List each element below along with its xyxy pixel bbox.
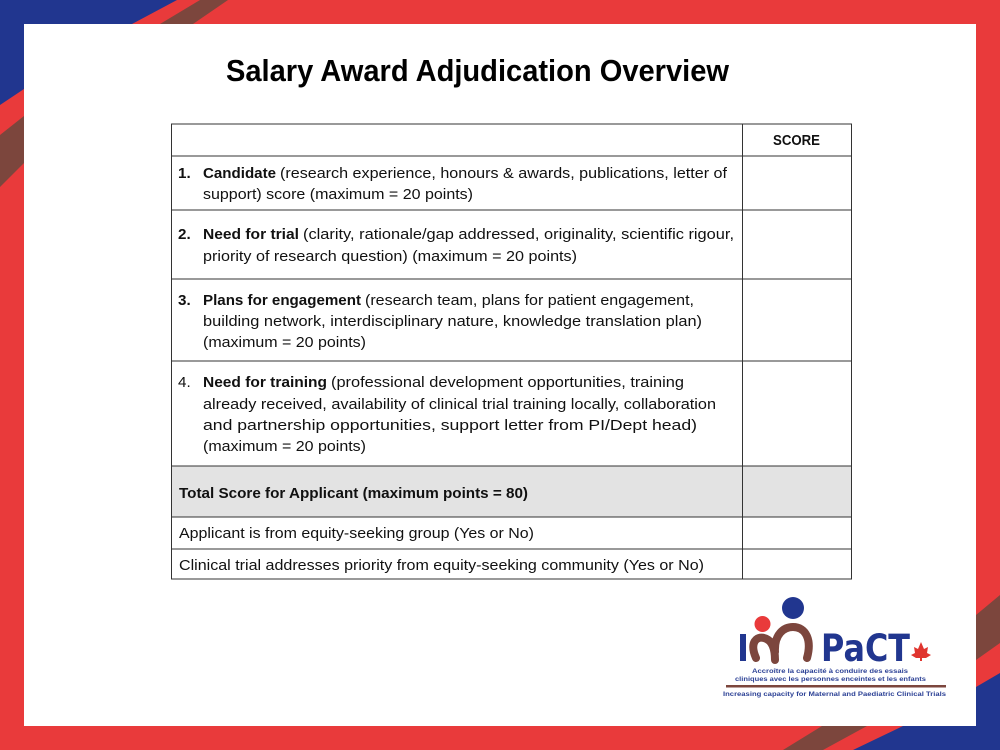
score table bbox=[172, 124, 852, 579]
row 4: need for training bbox=[178, 374, 716, 455]
row 2: need for trial: 2. bbox=[178, 226, 191, 243]
row 3: plans for engagement bbox=[178, 292, 702, 351]
table grid bbox=[172, 124, 852, 579]
row 3: plans for engagement: (maximum = 20 points) bbox=[203, 334, 366, 351]
header: score: SCORE bbox=[773, 132, 820, 149]
row 1: candidate: support) score (maximum = 20 points) bbox=[203, 186, 473, 203]
row 3: plans for engagement: (research team, plans for patient engagement, bbox=[365, 292, 694, 309]
equity community row: Clinical trial addresses priority from equity-seeking community (Yes or No) bbox=[179, 557, 704, 574]
row 4: need for training: (professional development opportunities, training bbox=[331, 374, 684, 391]
logo tagline english: Increasing capacity for Maternal and Paediatric Clinical Trials bbox=[723, 691, 946, 698]
title: Salary Award Adjudication Overview bbox=[226, 53, 730, 88]
logo tagline french: Accroître la capacité à conduire des essais bbox=[752, 668, 908, 675]
row 3: plans for engagement: building network, interdisciplinary nature, knowledge translation plan) bbox=[203, 313, 702, 330]
row 3: plans for engagement: Plans for engagement bbox=[203, 292, 361, 309]
row 1: candidate: 1. bbox=[178, 165, 191, 182]
icon: maple leaf bbox=[911, 642, 931, 661]
row 2: need for trial: Need for trial bbox=[203, 226, 299, 243]
logo wordmark bbox=[740, 627, 911, 670]
row 1: candidate: (research experience, honours & awards, publications, letter of bbox=[280, 165, 728, 182]
row 4: need for training: Need for training bbox=[203, 374, 327, 391]
row 2: need for trial: (clarity, rationale/gap addressed, originality, scientific rigour, bbox=[303, 226, 734, 243]
row 1: candidate bbox=[178, 165, 728, 203]
logo wordmark: PaCT bbox=[821, 627, 911, 670]
row 1: candidate: Candidate bbox=[203, 165, 276, 182]
row 4: need for training: 4. bbox=[178, 374, 191, 391]
row 3: plans for engagement: 3. bbox=[178, 292, 191, 309]
total score row: Total Score for Applicant (maximum points = 80) bbox=[179, 485, 528, 502]
icon: people figures bbox=[753, 597, 809, 660]
logo: IMPaCT bbox=[723, 597, 946, 698]
logo divider bbox=[726, 685, 946, 688]
logo tagline french: cliniques avec les personnes enceintes et les enfants bbox=[735, 676, 926, 683]
total row shading bbox=[172, 466, 851, 517]
row 2: need for trial: priority of research question) (maximum = 20 points) bbox=[203, 248, 577, 265]
equity applicant row: Applicant is from equity-seeking group (Yes or No) bbox=[179, 525, 534, 542]
row 4: need for training: already received, availability of clinical trial training locally, collaboration bbox=[203, 396, 716, 413]
logo tagline french bbox=[735, 668, 926, 683]
row 4: need for training: and partnership opportunities, support letter from PI/Dept head) bbox=[203, 417, 697, 434]
row 4: need for training: (maximum = 20 points) bbox=[203, 438, 366, 455]
row 2: need for trial bbox=[178, 226, 734, 265]
